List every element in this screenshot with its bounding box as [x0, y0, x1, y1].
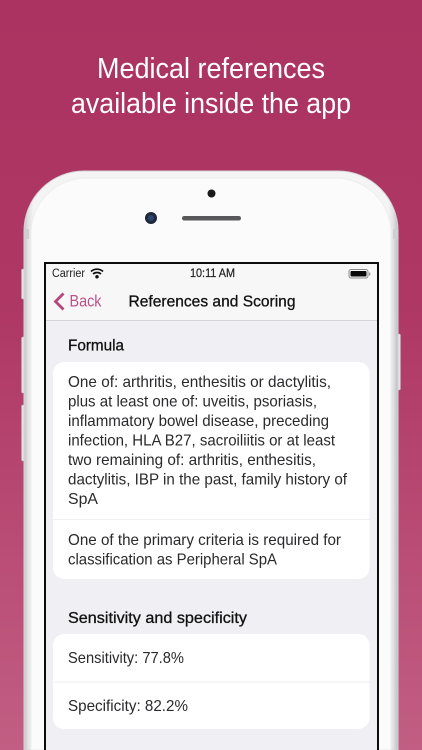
screen border — [45, 263, 378, 750]
screen — [45, 263, 378, 750]
formula text: plus at least one of: uveitis, psoriasis, — [68, 394, 317, 410]
sensor dot — [208, 190, 216, 198]
title — [71, 53, 351, 120]
status bar — [52, 268, 370, 280]
navigation bar background — [45, 263, 378, 320]
classification text: classification as Peripheral SpA — [68, 552, 277, 568]
heading: formula: Formula — [68, 338, 124, 354]
status bar: 10:11 AM — [190, 268, 235, 280]
back button — [56, 292, 102, 310]
formula text: inflammatory bowel disease, preceding — [68, 413, 329, 430]
sensitivity value: Sensitivity: 77.8% — [68, 650, 184, 667]
formula text: two remaining of: arthritis, enthesitis, — [68, 452, 316, 469]
icon: battery — [349, 270, 370, 278]
title: Medical references — [97, 53, 325, 85]
back button: Back — [70, 292, 102, 310]
phone body — [24, 171, 398, 750]
icon: wifi — [91, 269, 103, 278]
formula text: SpA — [68, 491, 98, 508]
status bar: Carrier — [52, 268, 85, 280]
phone mockup — [22, 171, 400, 750]
formula text: dactylitis, IBP in the past, family history of — [68, 472, 348, 488]
panel: sensitivity and specificity card — [53, 634, 370, 729]
formula text: One of: arthritis, enthesitis or dactylitis, — [68, 374, 331, 391]
formula text — [68, 374, 348, 508]
classification text: One of the primary criteria is required for — [68, 532, 342, 549]
side buttons — [22, 269, 400, 461]
nav title: References and Scoring — [128, 294, 296, 310]
speaker — [182, 216, 241, 220]
formula text: infection, HLA B27, sacroiliitis or at least — [68, 432, 336, 450]
specificity value: Specificity: 82.2% — [68, 698, 188, 715]
title: available inside the app — [71, 88, 351, 120]
heading: sensitivity and specificity: Sensitivity and specificity — [68, 610, 247, 627]
classification text — [68, 532, 342, 568]
front camera — [145, 212, 157, 224]
antenna bands — [24, 229, 398, 239]
panel: formula card — [53, 362, 370, 579]
